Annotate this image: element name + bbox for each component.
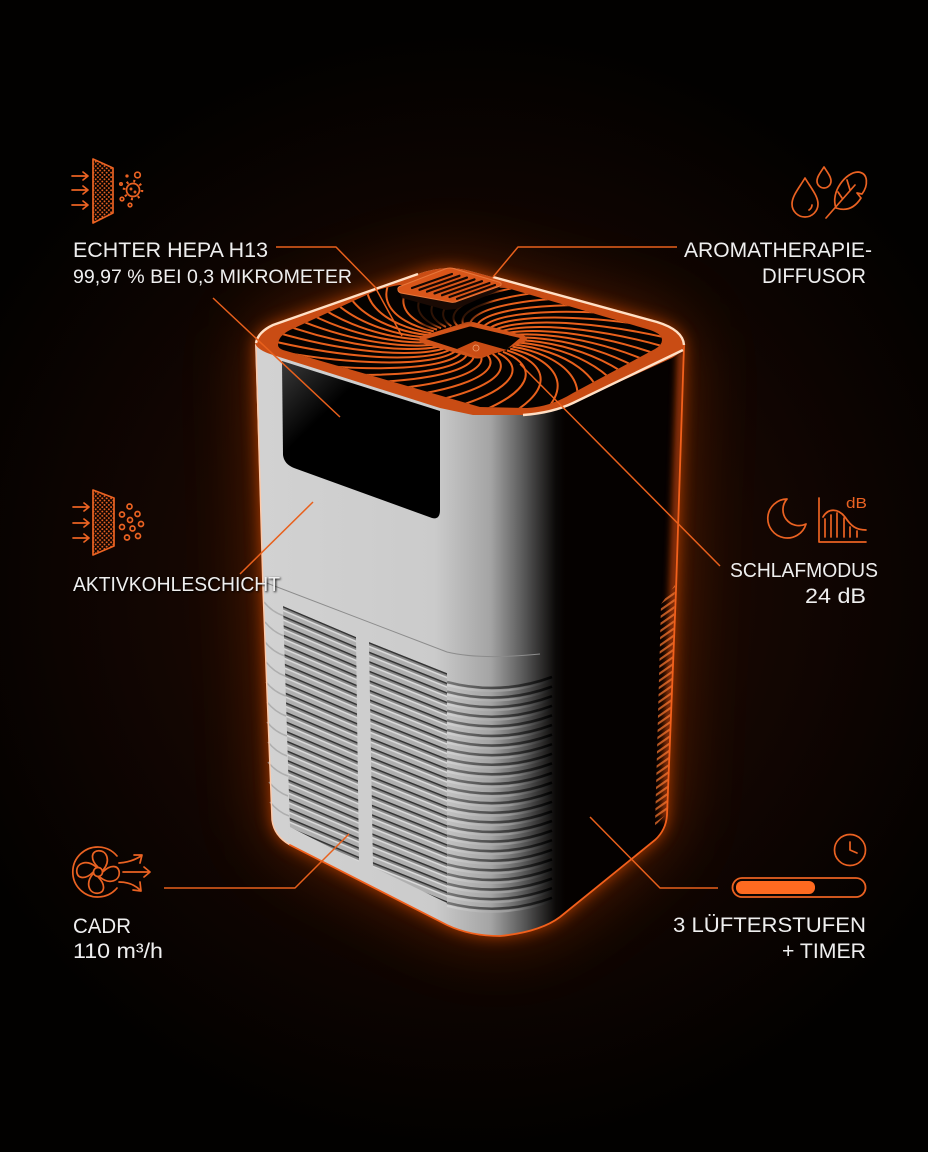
icon: moon and decibel chart [768, 495, 867, 542]
label: aroma: AROMATHERAPIE- [684, 239, 872, 262]
icon: carbon filter [73, 490, 144, 555]
control panel [420, 322, 526, 358]
label: fan levels [673, 914, 866, 963]
left intake grille [283, 606, 359, 862]
leader: HEPA filter window [213, 298, 340, 417]
label: HEPA [73, 239, 352, 288]
fan level bar [732, 878, 866, 897]
corner ribs [447, 677, 552, 912]
lid highlight [256, 274, 684, 415]
icon: clock [834, 834, 866, 866]
label: HEPA: ECHTER HEPA H13 [73, 239, 268, 262]
label: fan levels: + TIMER [782, 940, 866, 963]
icon: drops and feather [792, 167, 866, 218]
shadow under diffuser [400, 287, 503, 328]
housing body [255, 268, 684, 936]
leader: HEPA [276, 247, 402, 336]
label: CADR: CADR [73, 915, 131, 938]
label: activated carbon: AKTIVKOHLESCHICHT [73, 573, 280, 596]
top grille [278, 285, 662, 408]
icon: moon and decibel chart: dB [846, 495, 867, 512]
right intake grille [366, 640, 450, 906]
label: CADR [73, 915, 163, 963]
left corner ribs [264, 602, 289, 816]
outer edges [256, 345, 684, 936]
label: HEPA: 99,97 % BEI 0,3 MIKROMETER [73, 266, 352, 288]
label: sleep mode [730, 559, 878, 608]
leader: fan levels [590, 817, 718, 888]
label: sleep mode: 24 dB [805, 585, 866, 608]
device glow [255, 268, 684, 936]
air purifier [254, 268, 686, 937]
spiral vanes [278, 287, 662, 408]
label: aroma [684, 239, 872, 288]
icon: HEPA filter [72, 159, 142, 223]
right face inner glow [666, 350, 682, 820]
label: fan levels: 3 LÜFTERSTUFEN [673, 914, 866, 937]
right side rib highlights [655, 585, 675, 826]
label: sleep mode: SCHLAFMODUS [730, 559, 878, 582]
aroma diffuser [398, 268, 502, 310]
label: aroma: DIFFUSOR [762, 265, 866, 288]
leader: CADR [164, 834, 349, 888]
icon: fan [73, 847, 150, 897]
leader lines [164, 247, 720, 888]
label: CADR: 110 m³/h [73, 940, 163, 963]
leader: aroma diffuser [493, 247, 677, 277]
leader: sleep mode [520, 364, 720, 566]
leader: activated carbon [240, 502, 313, 574]
top lid [255, 268, 684, 415]
filter window [282, 361, 440, 518]
